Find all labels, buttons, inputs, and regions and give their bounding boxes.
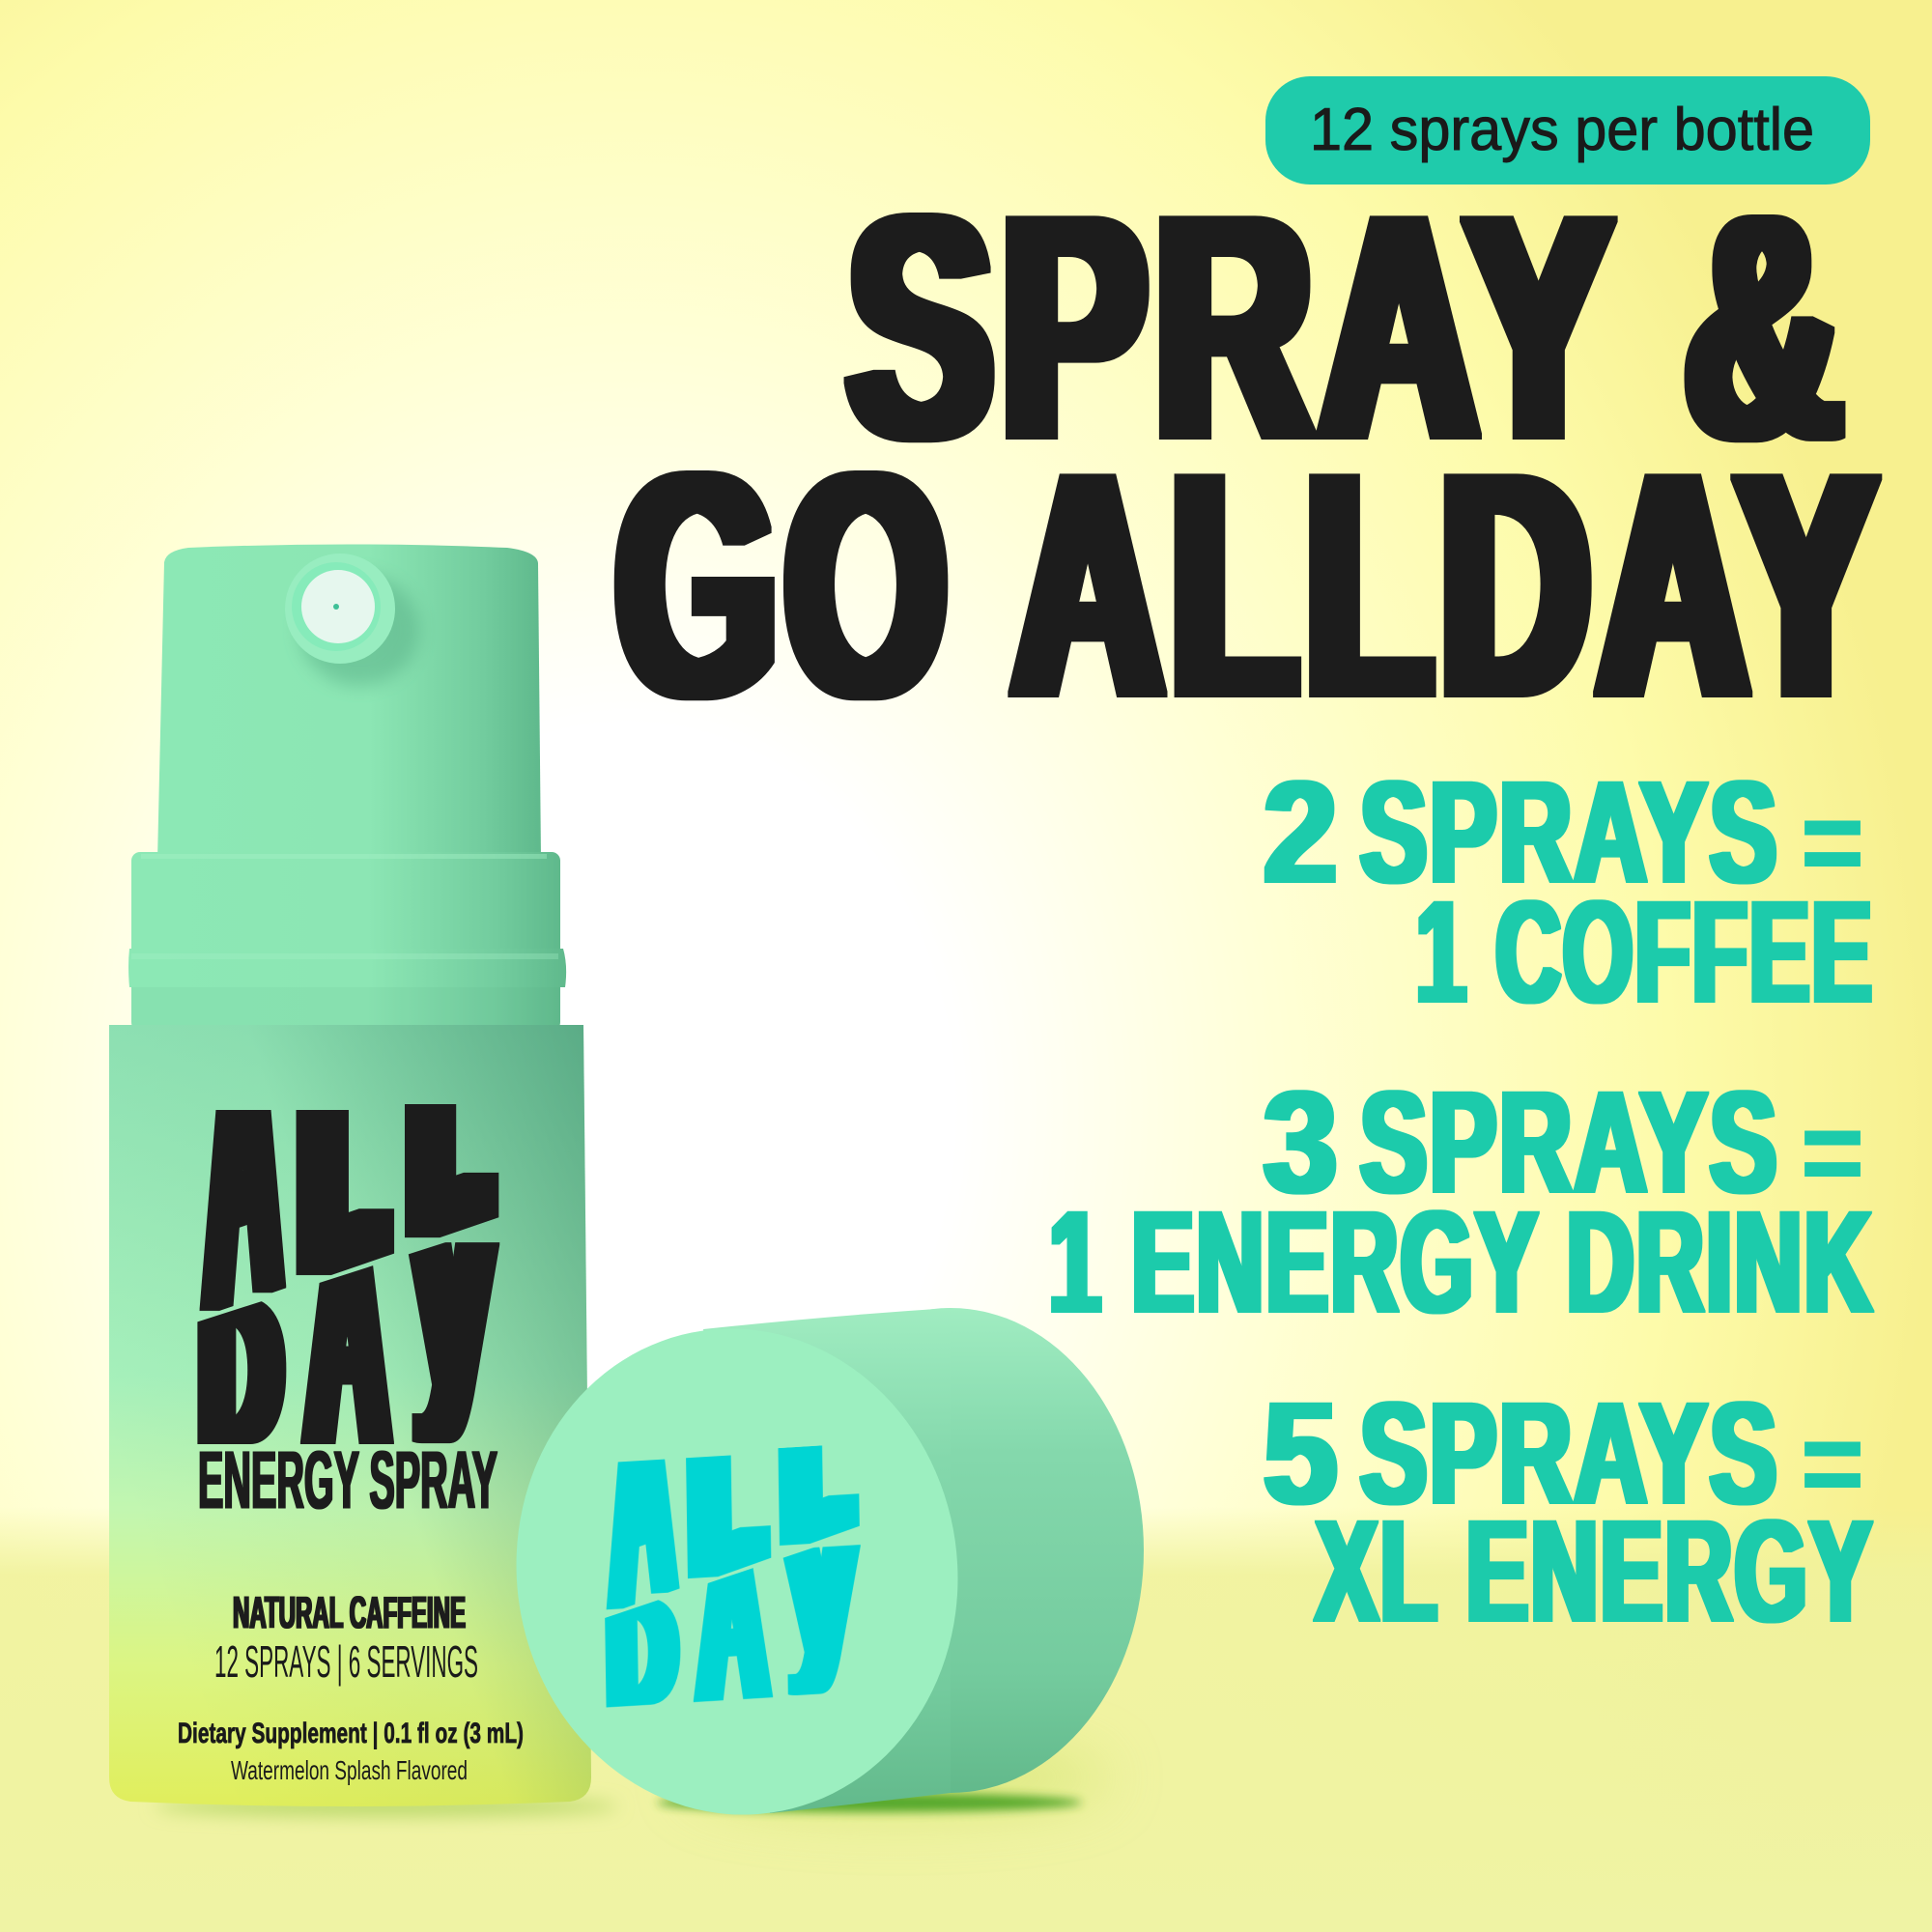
equivalence: 5 sprays: 5 xyxy=(1264,1372,1341,1534)
pill: sprays per bottle: 12 sprays per bottle xyxy=(1310,97,1814,163)
cap logo: ALL DAY: L xyxy=(692,1301,760,1640)
label logo: ALL DAY: L xyxy=(305,901,381,1359)
spray head xyxy=(157,545,541,860)
label: dietary supplement: Dietary Supplement | 0.1 fl oz (3 mL) xyxy=(178,1718,524,1749)
bottle shadow xyxy=(155,1797,618,1816)
label logo: ALL DAY xyxy=(197,1104,500,1444)
equivalence: 2 sprays: = xyxy=(1804,778,1861,907)
equivalence: 2 sprays: 2 xyxy=(1264,751,1341,913)
title xyxy=(616,150,1884,762)
product: spray bottle xyxy=(109,545,618,1816)
floor shadow tint xyxy=(686,1743,1111,1812)
nozzle xyxy=(285,554,419,686)
collar xyxy=(128,852,566,1031)
cap logo: ALL DAY: y xyxy=(791,1472,852,1696)
label logo: ALL DAY: A xyxy=(307,1137,387,1516)
bottle body xyxy=(109,1025,591,1806)
label logo: ALL DAY: L xyxy=(414,866,485,1321)
cap logo: ALL DAY: A xyxy=(609,1300,674,1678)
cap logo: ALL DAY: D xyxy=(608,1564,676,1739)
cap logo: ALL DAY: L xyxy=(784,1269,848,1606)
cap face xyxy=(485,1300,989,1843)
cap logo: ALL DAY xyxy=(605,1445,861,1708)
equivalence: 2 sprays xyxy=(1264,751,1874,1033)
label logo: ALL DAY: A xyxy=(207,894,279,1404)
cap shadow xyxy=(657,1793,1082,1812)
label: flavor: Watermelon Splash Flavored xyxy=(231,1755,468,1785)
label: NATURAL CAFFEINE: NATURAL CAFFEINE xyxy=(233,1587,466,1637)
cap side xyxy=(703,1308,1144,1813)
product: bottle cap xyxy=(516,1308,1144,1832)
equivalence: 3 sprays: = xyxy=(1804,1088,1861,1217)
pill: sprays per bottle xyxy=(1265,76,1870,185)
label logo: ALL DAY: D xyxy=(202,1253,279,1488)
equivalence: 3 sprays: 3 xyxy=(1264,1061,1341,1223)
cap logo: ALL DAY: A xyxy=(696,1474,768,1754)
label logo: ALL DAY: y xyxy=(419,1142,487,1444)
equivalence: 5 sprays xyxy=(1264,1372,1874,1652)
product: spray bottle: 12 SPRAYS | 6 SERVINGS xyxy=(214,1636,478,1687)
equivalence: 3 sprays xyxy=(1049,1061,1874,1343)
product: spray bottle: ENERGY SPRAY xyxy=(198,1435,497,1525)
equivalence: 5 sprays: = xyxy=(1804,1399,1861,1528)
